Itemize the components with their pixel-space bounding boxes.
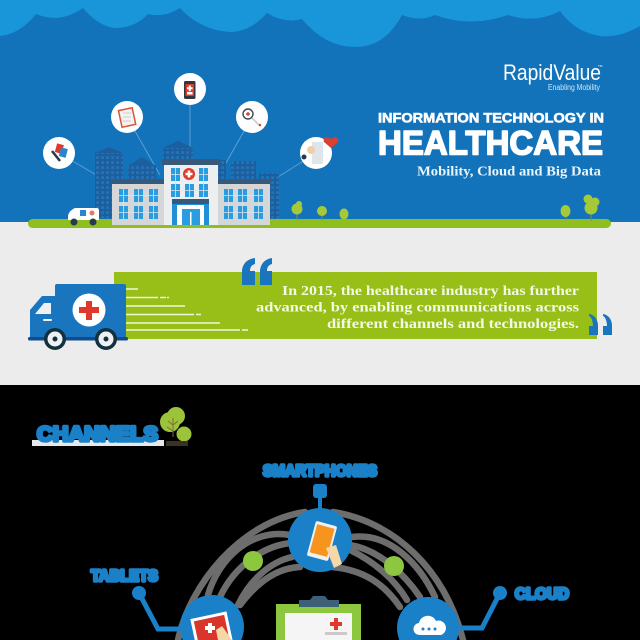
delivery truck — [28, 284, 128, 350]
logo: Enabling Mobility — [548, 83, 600, 92]
logo: TM — [598, 64, 603, 68]
speed lines — [126, 289, 248, 330]
clouds — [0, 0, 640, 47]
hospital windows — [119, 168, 263, 219]
clipboard — [276, 596, 361, 640]
opening quote mark — [242, 258, 272, 285]
network arcs — [178, 512, 463, 640]
quote text: different channels and technologies. — [327, 316, 579, 331]
smartphone node — [288, 508, 352, 572]
cloud node — [397, 597, 459, 640]
section heading: channels: CHANNELS — [37, 423, 158, 446]
connector dot: smartphones — [313, 484, 327, 498]
label: tablets: TABLETS — [91, 568, 158, 585]
ground strip — [28, 219, 611, 228]
icon: hand with heart — [300, 137, 338, 169]
connector lines — [59, 89, 316, 186]
icon: mobile phone — [174, 73, 206, 105]
subtitle: Mobility, Cloud and Big Data — [417, 164, 601, 178]
icon: clipboard — [111, 101, 143, 133]
logo: RapidValue — [503, 60, 601, 85]
green node left — [243, 551, 263, 571]
heading tree icon — [160, 407, 192, 446]
icon: documents — [43, 137, 75, 169]
icon: magnifier — [236, 101, 268, 133]
city skyline — [95, 141, 279, 220]
connector: tablets — [132, 586, 182, 629]
connector: smartphones — [318, 490, 322, 510]
quote text: advanced, by enabling communications across — [256, 300, 579, 314]
label: smartphones: SMARTPHONES — [263, 463, 377, 480]
quote text: In 2015, the healthcare industry has further — [282, 283, 579, 298]
green node right — [384, 556, 404, 576]
title: healthcare: HEALTHCARE — [378, 124, 603, 162]
tablet node — [180, 595, 244, 640]
trees: header — [292, 194, 600, 221]
ambulance — [68, 208, 99, 226]
hospital building — [111, 159, 271, 225]
closing quote mark — [589, 314, 612, 335]
panel: green quote box — [114, 272, 597, 339]
quote text — [256, 283, 579, 331]
title: information technology in: INFORMATION TECHNOLOGY IN — [378, 110, 604, 126]
label: cloud: CLOUD — [515, 586, 569, 603]
connector: cloud — [460, 586, 507, 628]
